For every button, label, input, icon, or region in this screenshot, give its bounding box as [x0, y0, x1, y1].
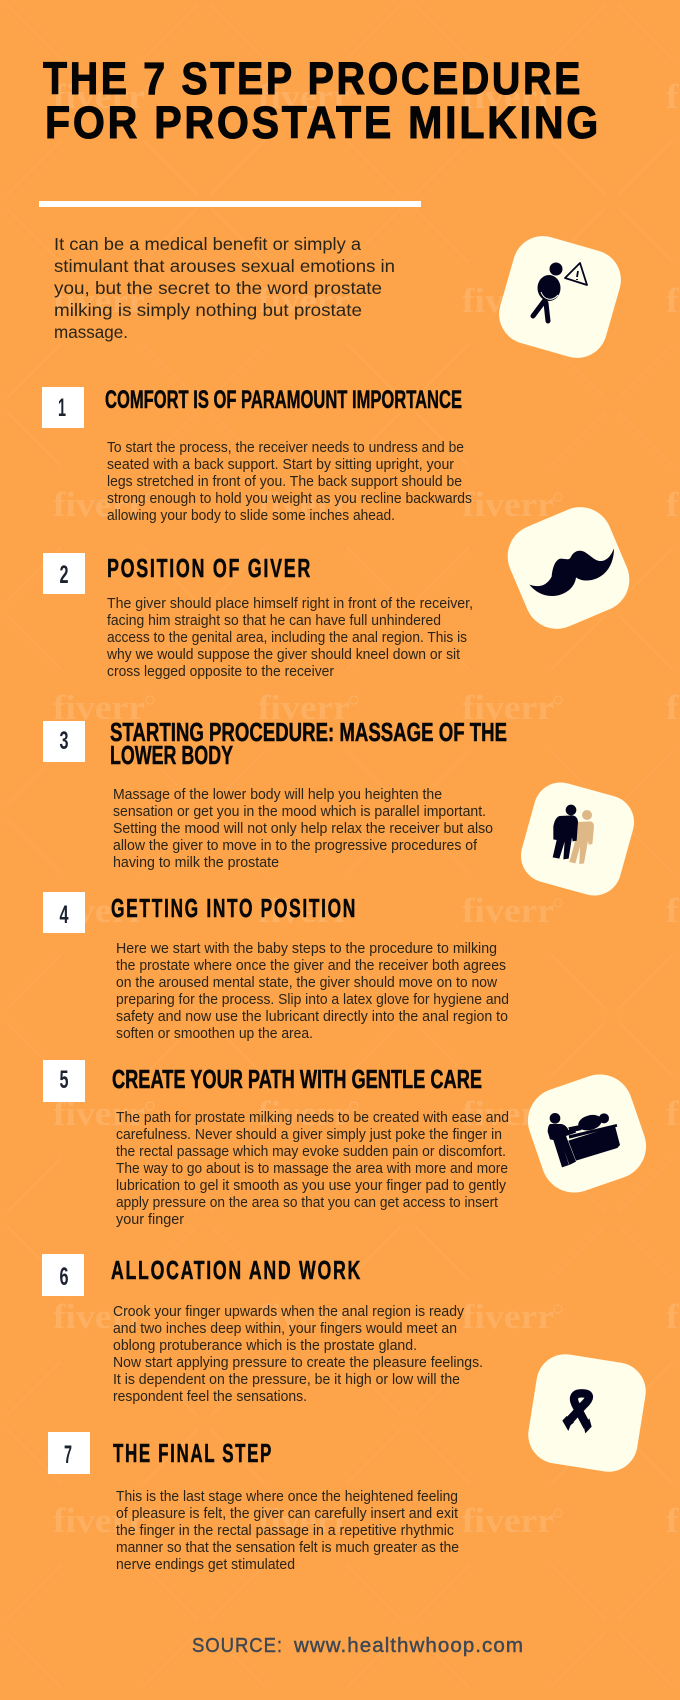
watermark grid: fiverr	[258, 77, 350, 116]
watermark grid: fiverr	[462, 1501, 554, 1540]
body 4: preparing for the process. Slip into a latex glove for hygiene and	[116, 992, 509, 1008]
body 4	[116, 941, 509, 1042]
number box 1: 1	[58, 394, 66, 422]
step 7	[48, 1432, 459, 1573]
title: FOR PROSTATE MILKING	[45, 97, 601, 148]
body 5: your finger	[116, 1212, 184, 1228]
icon: two people	[515, 776, 640, 902]
step 6	[42, 1254, 483, 1405]
heading 2: POSITION OF GIVER	[107, 553, 312, 583]
watermark grid: fiverr	[53, 1501, 145, 1540]
body 2: The giver should place himself right in front of the receiver,	[107, 596, 473, 612]
watermark grid: fiverr	[462, 1297, 554, 1336]
body 7: This is the last stage where once the heightened feeling	[116, 1489, 458, 1505]
watermark grid: fiverr	[53, 1297, 145, 1336]
body 6: Now start applying pressure to create the pleasure feelings.	[113, 1355, 483, 1371]
body 5: The path for prostate milking needs to be created with ease and	[116, 1110, 509, 1126]
source line: www.healthwhoop.com	[293, 1635, 524, 1657]
watermark grid: fiverr	[53, 1094, 145, 1133]
icon: awareness ribbon	[524, 1350, 650, 1476]
watermark grid: fiverr	[462, 891, 554, 930]
body 2	[106, 596, 473, 680]
step 5	[43, 1060, 509, 1228]
body 3: sensation or get you in the mood which is parallel important.	[113, 804, 486, 820]
heading 3	[110, 717, 507, 770]
intro text: milking is simply nothing but prostate	[54, 300, 362, 320]
number box 2	[43, 553, 85, 594]
body 4: the prostate where once the giver and the receiver both agrees	[116, 958, 506, 974]
body 6: respondent feel the sensations.	[113, 1389, 307, 1405]
heading 5: CREATE YOUR PATH WITH GENTLE CARE	[112, 1064, 482, 1094]
body 1	[107, 440, 472, 524]
heading 6: ALLOCATION AND WORK	[111, 1255, 362, 1285]
watermark grid: fiverr	[258, 1501, 350, 1540]
body 3: Setting the mood will not only help relax the receiver but also	[113, 821, 493, 837]
watermark grid: fiverr	[258, 1297, 350, 1336]
number box 3	[43, 721, 85, 762]
watermark grid: fiverr	[462, 77, 554, 116]
body 1: allowing your body to slide some inches ahead.	[107, 508, 395, 524]
intro text: you, but the secret to the word prostate	[54, 278, 382, 298]
body 2: access to the genital area, including the anal region. This is	[107, 630, 467, 646]
number box 4: 4	[60, 901, 69, 929]
heading 4: GETTING INTO POSITION	[111, 893, 357, 923]
step 4	[43, 892, 509, 1042]
number box 5	[43, 1060, 85, 1102]
body 2: facing him straight so that he can have full unhindered	[107, 613, 441, 629]
body 1: seated with a back support. Start by sitting upright, your	[107, 457, 454, 473]
body 1: To start the process, the receiver needs to undress and be	[107, 440, 464, 456]
body 6: oblong protuberance which is the prostate gland.	[113, 1338, 417, 1354]
step 3	[43, 717, 507, 871]
watermark grid: fiverr	[53, 891, 145, 930]
body 6: It is dependent on the pressure, be it high or low will the	[113, 1372, 460, 1388]
intro text: massage.	[54, 322, 128, 342]
source line: SOURCE:	[192, 1635, 283, 1657]
watermark grid: fiverr	[53, 485, 145, 524]
body 7: nerve endings get stimulated	[116, 1557, 295, 1573]
body 3: allow the giver to move in to the progressive procedures of	[113, 838, 478, 854]
title underline bar	[39, 201, 421, 207]
body 6: Crook your finger upwards when the anal region is ready	[113, 1304, 465, 1320]
watermark grid: fiverr	[462, 1094, 554, 1133]
heading 3: LOWER BODY	[110, 740, 233, 770]
body 7: of pleasure is felt, the giver can carefully insert and exit	[116, 1506, 458, 1522]
body 5	[116, 1110, 509, 1228]
body 6	[113, 1304, 483, 1405]
body 4: Here we start with the baby steps to the procedure to milking	[116, 941, 497, 957]
body 4: on the aroused mental state, the giver should move on to now	[116, 975, 498, 991]
number box 3: 3	[60, 727, 68, 755]
body 7: the finger in the rectal passage in a repetitive rhythmic	[116, 1523, 454, 1539]
body 1: strong enough to hold you weight as you recline backwards	[107, 491, 472, 507]
intro text: It can be a medical benefit or simply a	[54, 234, 361, 254]
watermark grid: fiverr	[462, 281, 554, 320]
body 7	[116, 1489, 459, 1573]
heading 3: STARTING PROCEDURE: MASSAGE OF THE	[110, 717, 507, 747]
title	[43, 53, 601, 148]
watermark grid: fiverr	[53, 688, 145, 727]
watermark grid: fiverr	[258, 281, 350, 320]
watermark grid: fiverr	[258, 1094, 350, 1133]
body 5: lubrication to gel it smooth as you use your finger pad to gently	[116, 1178, 507, 1194]
body 4: safety and now use the lubricant directly into the anal region to	[116, 1009, 508, 1025]
watermark grid: fiverr	[53, 77, 145, 116]
heading 1: COMFORT IS OF PARAMOUNT IMPORTANCE	[105, 386, 462, 414]
number box 2: 2	[60, 561, 68, 589]
number box 7: 7	[64, 1441, 72, 1469]
body 7: manner so that the sensation felt is much greater as the	[116, 1540, 459, 1556]
body 6: and two inches deep within, your fingers would meet an	[113, 1321, 457, 1337]
watermark grid: fiverr	[462, 688, 554, 727]
icon: person with warning triangle	[492, 229, 628, 365]
icon: moustache	[498, 497, 639, 639]
watermark grid: fiverr	[258, 688, 350, 727]
number box 6	[42, 1254, 84, 1296]
heading 7: THE FINAL STEP	[113, 1438, 273, 1468]
body 2: why we would suppose the giver should kneel down or sit	[106, 647, 460, 663]
body 1: legs stretched in front of you. The back support should be	[107, 474, 462, 490]
watermark grid: fiverr	[258, 485, 350, 524]
body 3: Massage of the lower body will help you heighten the	[113, 787, 442, 803]
step 1	[42, 386, 472, 524]
source line	[192, 1635, 524, 1657]
number box 1	[42, 387, 84, 428]
watermark grid: fiverr	[258, 891, 350, 930]
body 3	[113, 787, 493, 871]
body 4: soften or smoothen up the area.	[116, 1026, 313, 1042]
body 2: cross legged opposite to the receiver	[107, 664, 334, 680]
watermark grid: fiverr	[53, 281, 145, 320]
number box 6: 6	[60, 1263, 68, 1291]
number box 7	[48, 1432, 90, 1474]
number box 5: 5	[60, 1066, 69, 1094]
body 5: The way to go about is to massage the area with more and more	[116, 1161, 508, 1177]
watermark grid: fiverr	[462, 485, 554, 524]
icon: person beside patient on bed	[519, 1065, 655, 1202]
step 2	[43, 553, 473, 680]
body 5: the rectal passage which may evoke sudden pain or discomfort.	[116, 1144, 506, 1160]
intro text	[54, 234, 395, 342]
intro text: stimulant that arouses sexual emotions in	[54, 256, 395, 276]
body 5: carefulness. Never should a giver simply just poke the finger in	[116, 1127, 502, 1143]
body 5: apply pressure on the area so that you can get access to insert	[116, 1195, 498, 1211]
title: THE 7 STEP PROCEDURE	[43, 53, 583, 104]
body 3: having to milk the prostate	[113, 855, 279, 871]
watermark grid	[53, 77, 680, 1540]
number box 4	[43, 892, 85, 933]
